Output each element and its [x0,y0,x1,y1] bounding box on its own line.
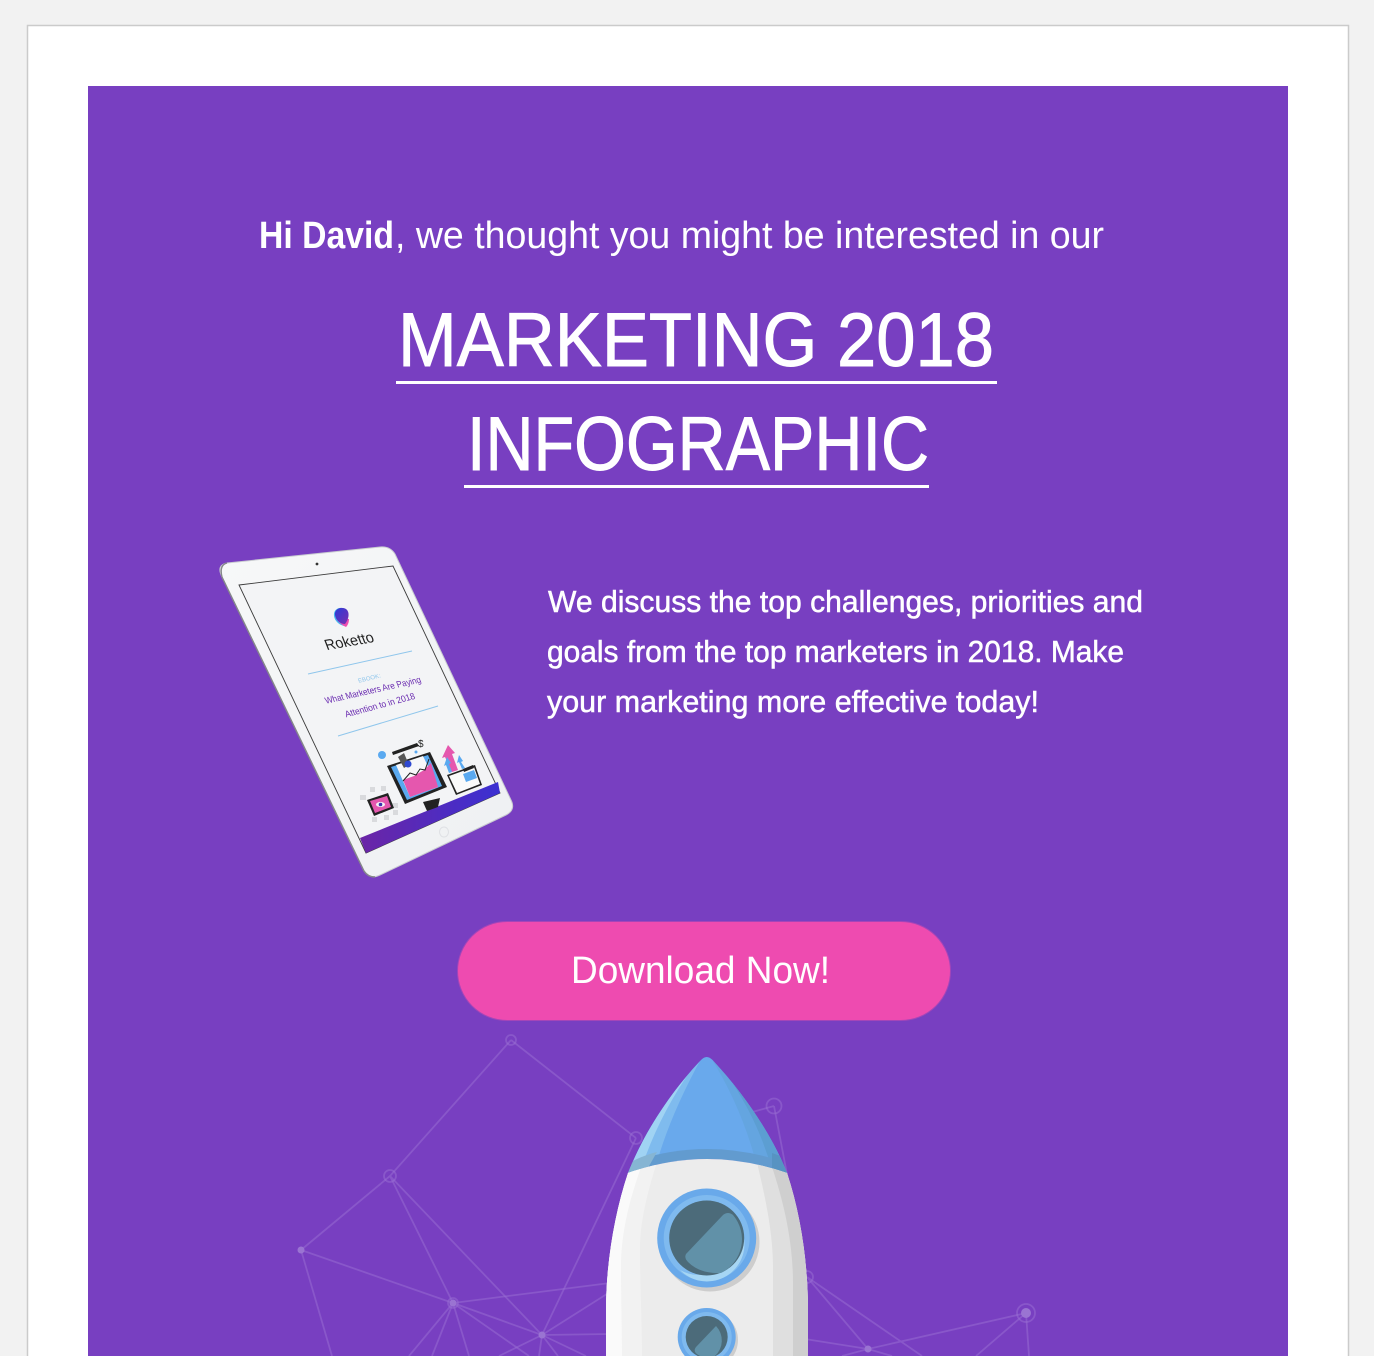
rocket small window [678,1308,738,1356]
rocket nose cone [628,1057,787,1173]
button: Download Now [458,922,950,1020]
cover gradient band [360,782,500,853]
illustration: growth arrows and card [442,745,482,795]
cover label: EBOOK: [357,673,382,685]
tablet body [220,547,513,877]
title: Marketing 2018 Infographic [396,298,997,488]
illustration: small screen with eye [360,786,398,822]
tablet home button [440,827,448,837]
paragraph: your marketing more effective today! [547,685,1039,719]
cover title [323,675,422,719]
illustration: monitor chart [378,739,447,811]
rocket body [606,1159,808,1356]
intro sentence: Hi David [259,215,394,257]
button: Download Now: Download Now! [571,950,830,992]
illustration: monitor chart: $ [418,739,424,750]
Roketto wordmark: Roketto [322,630,377,654]
cover rule top [308,651,412,674]
tablet screen [239,566,500,853]
title: Marketing 2018 Infographic: MARKETING 2018 [398,298,994,383]
background network of nodes and lines [298,1035,1035,1356]
cover rule bottom [338,706,438,736]
icon: Roketto logo [334,608,349,627]
tablet left metal edge [221,563,375,877]
rocket large window [657,1188,760,1292]
cover title: Attention to in 2018 [343,691,416,719]
cover title: What Marketers Are Paying [323,675,422,706]
title: Marketing 2018 Infographic: INFOGRAPHIC [467,402,929,487]
tablet camera [316,563,318,565]
tablet mockup showing the ebook cover [220,547,513,877]
paragraph [547,585,1143,719]
intro sentence: , we thought you might be interested in our [395,215,1104,257]
paragraph: goals from the top marketers in 2018. Make [547,635,1124,669]
illustration: rocket [600,1050,815,1356]
paragraph: We discuss the top challenges, priorities and [548,585,1143,619]
